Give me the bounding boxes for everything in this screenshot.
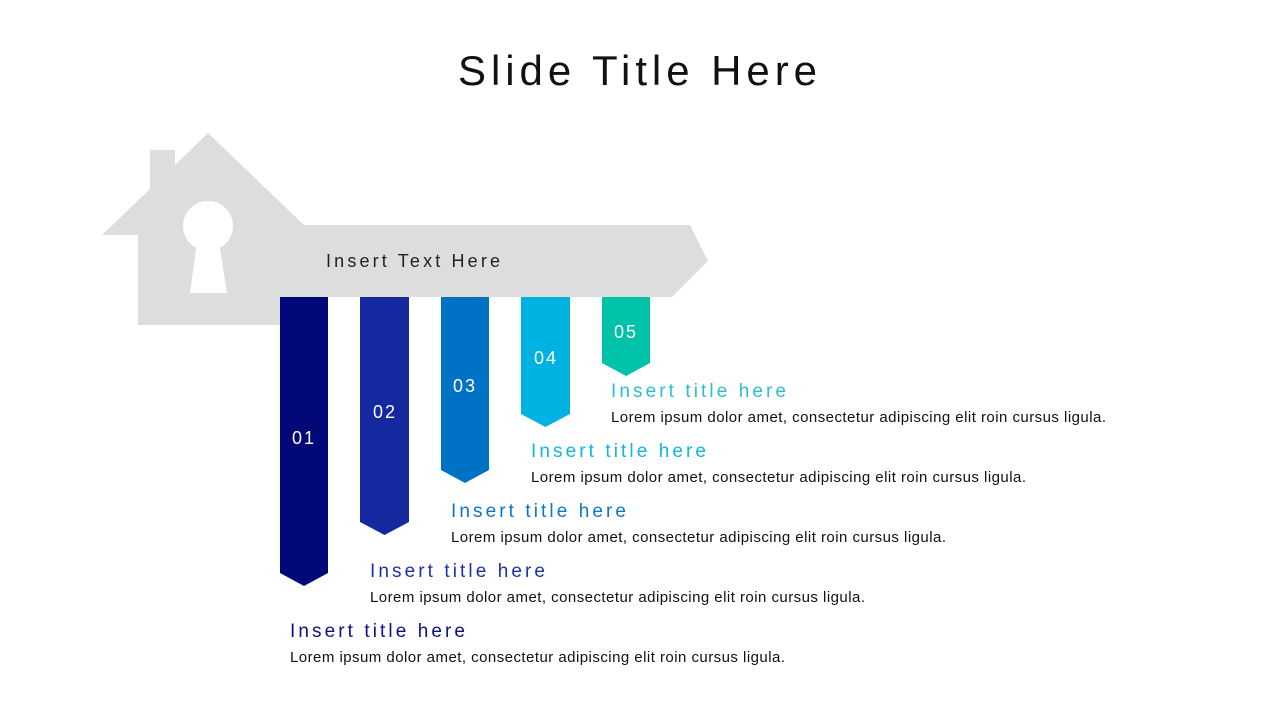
text block 02: Insert title here (370, 561, 545, 582)
text block 02 (370, 561, 865, 606)
icon: keyhole (183, 201, 233, 293)
bar 05 (602, 297, 650, 376)
bar 04: 04 (534, 348, 558, 368)
bar 02: 02 (373, 402, 397, 422)
bar 03: 03 (453, 376, 477, 396)
text block 04: Insert title here (531, 441, 706, 462)
text block 03 (451, 501, 946, 546)
band text: Insert Text Here (326, 251, 503, 271)
text block 05 (611, 381, 1106, 426)
bar 04 (521, 297, 570, 427)
text block 04: Lorem ipsum dolor amet, consectetur adipiscing elit roin cursus ligula. (531, 469, 1026, 486)
title: Slide Title Here (458, 47, 820, 94)
text block 03: Lorem ipsum dolor amet, consectetur adipiscing elit roin cursus ligula. (451, 529, 946, 546)
bar 01 (280, 297, 328, 586)
text block 01: Lorem ipsum dolor amet, consectetur adipiscing elit roin cursus ligula. (290, 649, 785, 666)
bar 05: 05 (614, 322, 638, 342)
bar 02 (360, 297, 409, 535)
text block 05: Insert title here (611, 381, 786, 402)
text block 03: Insert title here (451, 501, 626, 522)
text block 05: Lorem ipsum dolor amet, consectetur adipiscing elit roin cursus ligula. (611, 409, 1106, 426)
bar 03 (441, 297, 489, 483)
bar 01: 01 (292, 428, 316, 448)
text block 01: Insert title here (290, 621, 465, 642)
house key shape (102, 133, 708, 325)
text block 04 (531, 441, 1026, 486)
text block 02: Lorem ipsum dolor amet, consectetur adipiscing elit roin cursus ligula. (370, 589, 865, 606)
text block 01 (290, 621, 785, 666)
